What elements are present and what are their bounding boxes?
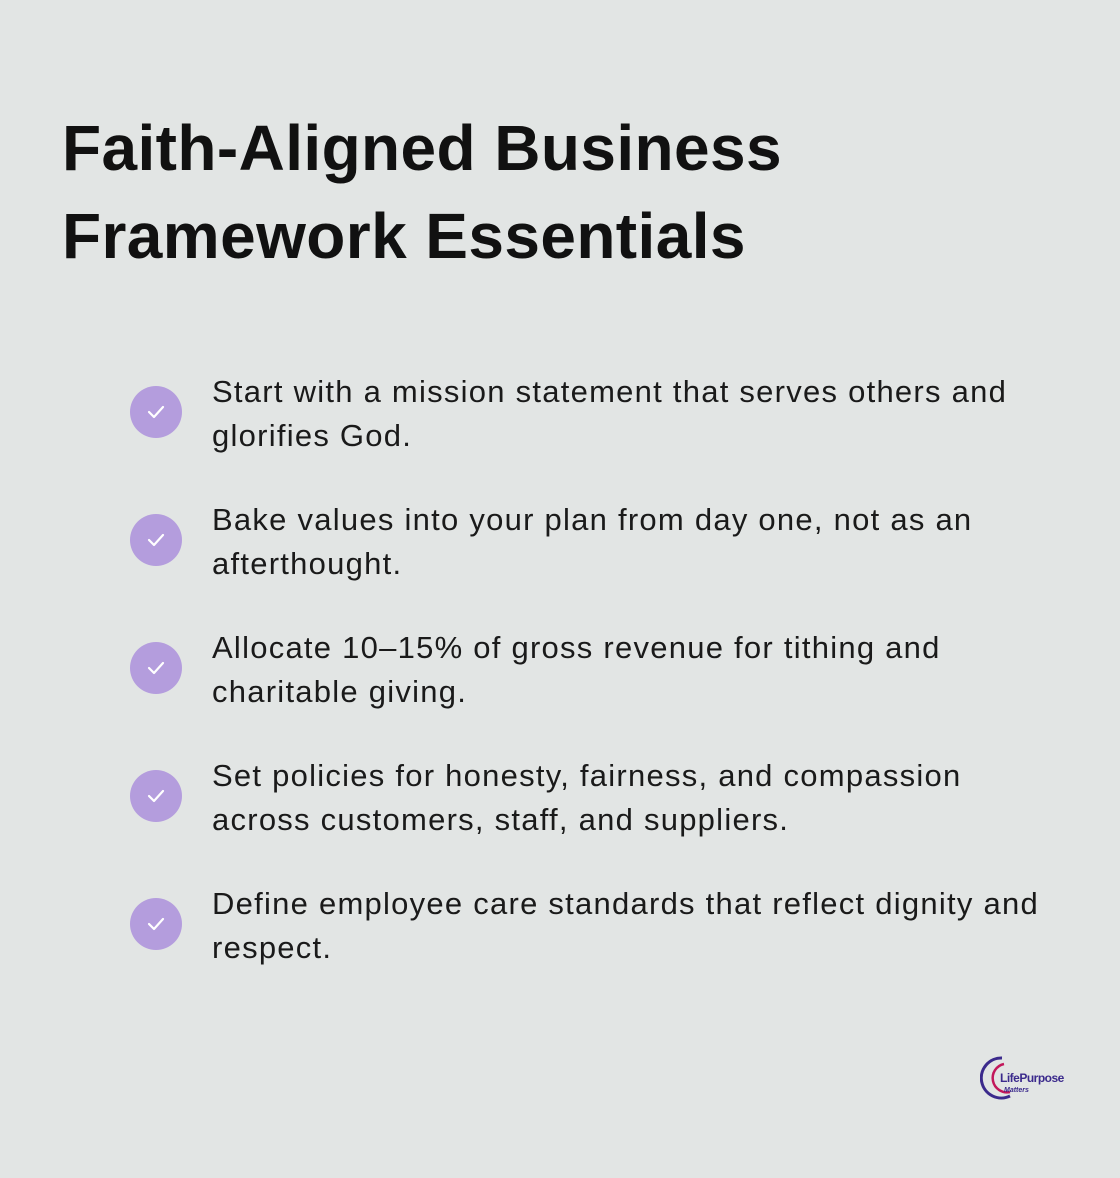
item 3 xyxy=(130,630,941,709)
title: Faith-Aligned Business xyxy=(62,112,782,184)
text: respect. xyxy=(212,930,332,965)
text: glorifies God. xyxy=(212,418,412,453)
icon: check xyxy=(130,386,182,438)
title: Framework Essentials xyxy=(62,200,746,272)
item 2 xyxy=(130,502,972,581)
icon: check xyxy=(130,770,182,822)
title xyxy=(62,112,782,272)
item 4 xyxy=(130,758,961,837)
logo xyxy=(980,1056,1065,1100)
text: Start with a mission statement that serves others and xyxy=(212,374,1007,409)
logo: Matters xyxy=(1004,1087,1029,1094)
text xyxy=(212,758,961,837)
text: charitable giving. xyxy=(212,674,467,709)
text: Allocate 10–15% of gross revenue for tithing and xyxy=(212,630,941,665)
text: Define employee care standards that reflect dignity and xyxy=(212,886,1039,921)
logo: LifePurpose xyxy=(1000,1071,1065,1085)
text: afterthought. xyxy=(212,546,402,581)
text xyxy=(212,374,1007,453)
item 1 xyxy=(130,374,1007,453)
text xyxy=(212,886,1039,965)
text xyxy=(212,502,972,581)
item 5 xyxy=(130,886,1039,965)
icon: check xyxy=(130,642,182,694)
icon: check xyxy=(130,898,182,950)
text xyxy=(212,630,941,709)
text: Set policies for honesty, fairness, and compassion xyxy=(212,758,961,793)
icon: check xyxy=(130,514,182,566)
text: Bake values into your plan from day one, not as an xyxy=(212,502,972,537)
text: across customers, staff, and suppliers. xyxy=(212,802,789,837)
